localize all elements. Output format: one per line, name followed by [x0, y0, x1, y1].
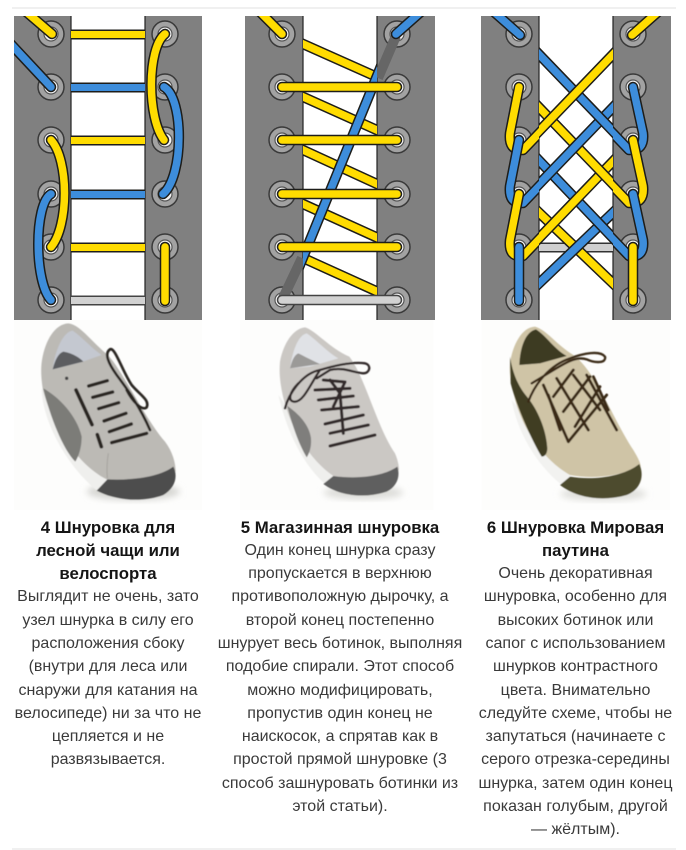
diagram: lacing 5 store lacing	[245, 16, 435, 320]
body: lacing 5: можно модифицировать,	[247, 682, 433, 699]
body: lacing 6: шнурка, затем один конец	[479, 775, 672, 792]
diagram: lacing 6 world web	[481, 16, 671, 320]
body: lacing 5: пропускается в верхнюю	[248, 565, 432, 582]
body: lacing 5: этой статьи).	[292, 798, 388, 815]
body: lacing 5: подобие спирали. Этот способ	[226, 658, 454, 675]
body: lacing 5	[218, 542, 462, 815]
body: lacing 4: узел шнурка в силу его	[22, 612, 194, 629]
body: lacing 4: расположения сбоку	[32, 635, 184, 652]
heading: lacing 4	[36, 518, 180, 583]
text block: lacing 4 description	[15, 518, 201, 768]
body: lacing 4	[15, 588, 201, 768]
body: lacing 6: показан голубым, другой	[483, 798, 668, 815]
body: lacing 5: противоположную дырочку, а	[231, 588, 449, 605]
body: lacing 5: способ зашнуровать ботинки из	[222, 775, 458, 792]
text block: lacing 5 description	[218, 518, 462, 815]
body: lacing 5: пропустив один конец не	[247, 705, 433, 722]
body: lacing 6: следуйте схеме, чтобы не	[479, 705, 672, 722]
body: lacing 4: (внутри для леса или	[29, 658, 187, 675]
body: lacing 5: второй конец постепенно	[246, 612, 434, 629]
body: lacing 4: велосипеде) ни за что не	[15, 705, 201, 722]
body: lacing 6	[479, 565, 672, 838]
body: lacing 6: высоких ботинок или	[498, 612, 653, 629]
body: lacing 6: шнуровка, особенно для	[484, 588, 667, 605]
body: lacing 4: цепляется и не	[52, 728, 164, 745]
body: lacing 6: запутаться (начинаете с	[486, 728, 665, 745]
body: lacing 5: Один конец шнурка сразу	[245, 542, 435, 559]
body: lacing 4: развязывается.	[51, 751, 165, 768]
text block: lacing 6 description	[479, 518, 672, 838]
heading: lacing 4: 4 Шнуровка для	[41, 518, 175, 536]
heading: lacing 6: паутина	[542, 541, 609, 560]
heading: lacing 4: лесной чащи или	[36, 541, 180, 560]
body: lacing 6: сапог с использованием	[486, 635, 665, 652]
body: lacing 6: — жёлтым).	[531, 821, 620, 838]
body: lacing 6: шнурков контрастного	[493, 658, 658, 675]
body: lacing 5: наискосок, а спрятав как в	[242, 728, 438, 745]
heading: lacing 6: 6 Шнуровка Мировая	[487, 518, 664, 536]
photo: grey shoe with lacing 4	[40, 322, 182, 504]
heading: lacing 6	[487, 518, 664, 560]
heading: lacing 5: 5 Магазинная шнуровка	[241, 518, 439, 536]
photo: beige shoe with lacing 6	[509, 326, 648, 504]
body: lacing 4: Выглядит не очень, зато	[17, 588, 199, 605]
photo: grey shoe with lacing 5	[278, 326, 404, 502]
body: lacing 6: серого отрезка-середины	[481, 751, 670, 768]
heading: lacing 4: велоспорта	[59, 564, 157, 583]
diagram: lacing 4 forest or cycling	[14, 16, 202, 320]
body: lacing 4: снаружи для катания на	[18, 682, 198, 699]
body: lacing 5: шнурует весь ботинок, выполняя	[218, 635, 462, 652]
body: lacing 5: простой прямой шнуровке (3	[233, 751, 447, 768]
body: lacing 6: Очень декоративная	[498, 565, 653, 582]
body: lacing 6: цвета. Внимательно	[501, 682, 650, 699]
